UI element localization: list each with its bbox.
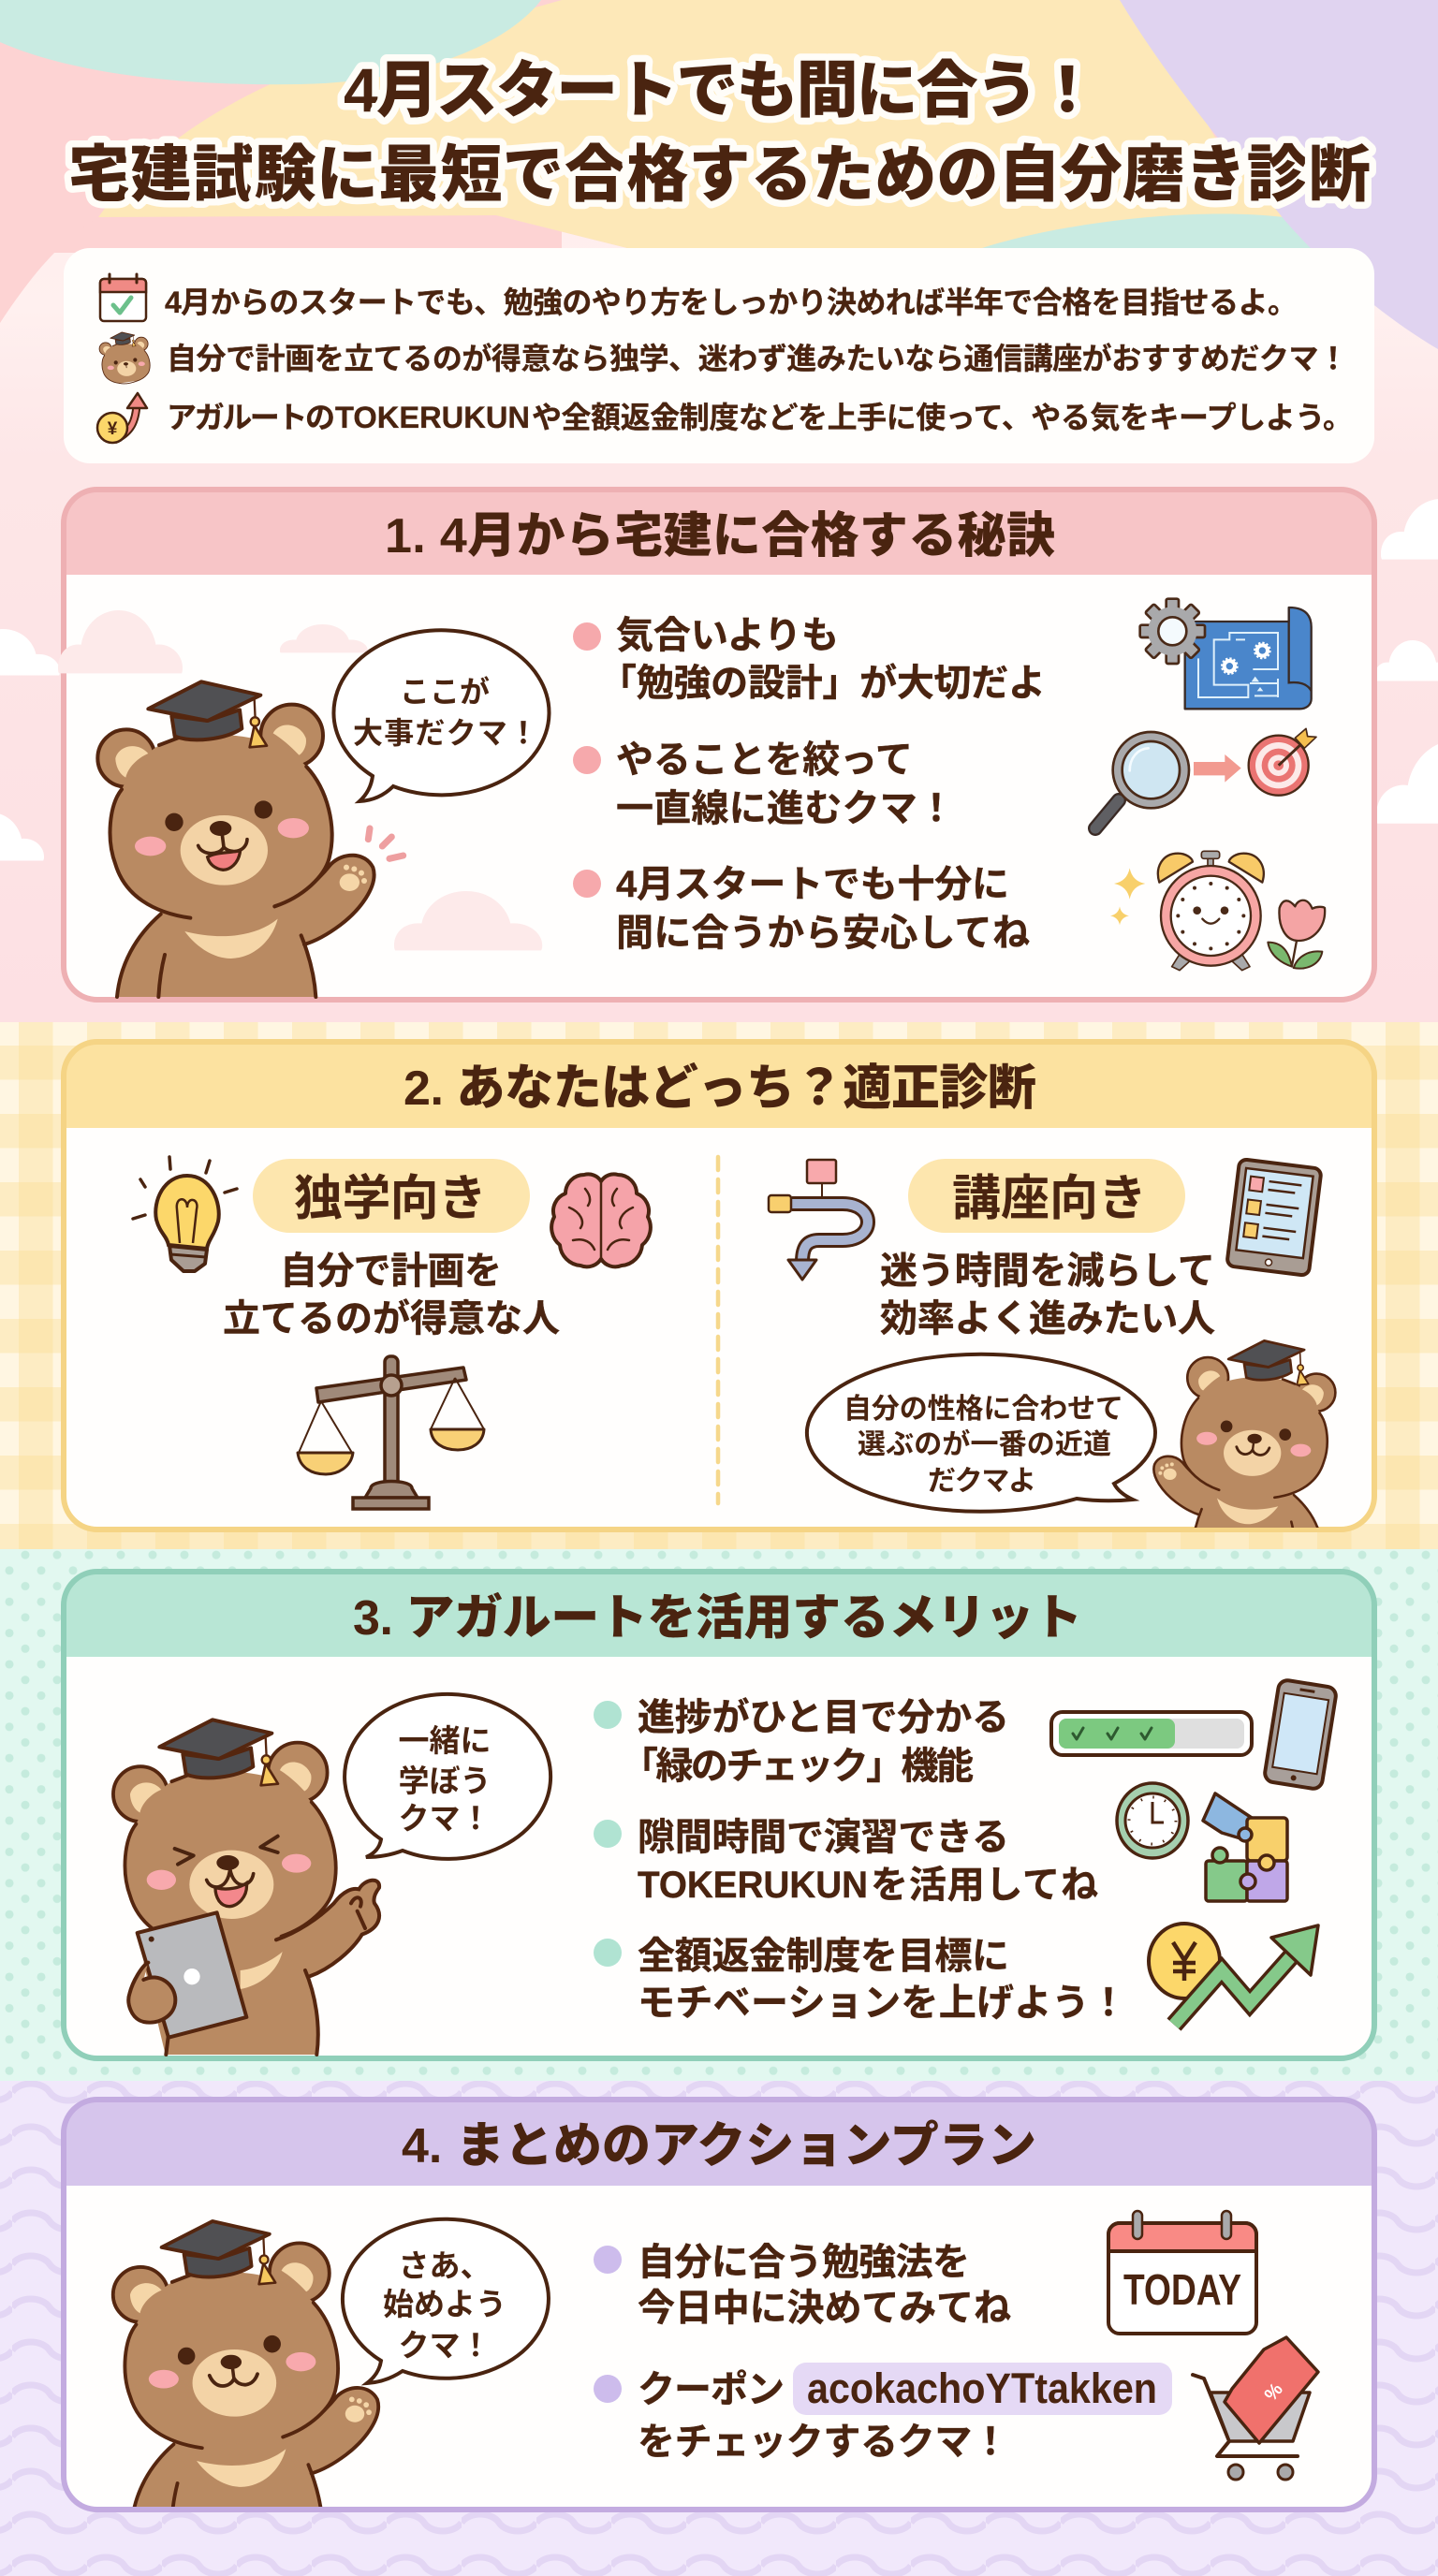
bullet 1-1 [573,615,1046,704]
header 2: 2. あなたはどっち？適正診断 [404,1061,1036,1116]
label: self study [253,1159,530,1233]
bullet 4-1: 今日中に決めてみてね [638,2288,1011,2329]
bullet 3-3: 全額返金制度を目標に [638,1936,1009,1977]
bullet 3-2: 隙間時間で演習できる [638,1817,1009,1858]
icon: yen coin and arrow [97,393,147,443]
bullet 1-1: 気合いよりも [616,615,839,656]
header 2 [64,1042,1374,1128]
label: course: 講座向き [952,1172,1147,1226]
title: 宅建試験に最短で合格するための自分磨き診断 [68,139,1371,209]
speech bubble 3: クマ！ [399,1801,491,1836]
speech bubble 4: クマ！ [399,2328,491,2363]
bullet 3-2 [594,1817,1098,1906]
text: self study description: 自分で計画を [280,1251,502,1292]
icon: yen coin and arrow: ¥ [108,419,118,439]
icon: puzzle [1203,1793,1287,1901]
bullet 1-3: 間に合うから安心してね [616,913,1030,954]
speech bubble 3: 一緒に [399,1723,491,1758]
text: intro line 3 [167,401,1353,434]
icon: blueprint and gear [1140,599,1312,709]
bullet 4-2: をチェックするクマ！ [638,2422,1009,2463]
coupon code: acokachoYTtakken [807,2364,1157,2412]
header 3 [64,1572,1374,1657]
speech bubble 3 [345,1694,550,1859]
title: 4月スタートでも間に合う！ [344,55,1098,124]
bullet 4-2: クーポン [638,2369,785,2410]
icon: progress bar with checks [1051,1712,1252,1755]
bullet 1-1: 「勉強の設計」が大切だよ [599,663,1046,704]
label: course [908,1159,1185,1233]
bullet 1-2: 一直線に進むクマ！ [616,788,955,829]
icon: smartphone [1264,1679,1337,1790]
text: intro line 3: や全額返金制度などを上手に使って、やる気をキープしよう。 [532,401,1353,434]
icon: light bulb [133,1157,237,1271]
icon: mini bear [99,332,150,384]
speech bubble 2: 自分の性格に合わせて [844,1394,1123,1425]
icon: cart with coupon ticket [1193,2337,1318,2480]
icon: brain [551,1174,651,1266]
icon: yen coin and rising arrow [1149,1924,1318,2025]
bullet 3-1: 「緑のチェック」機能 [621,1746,974,1787]
bullet 1-2: やることを絞って [616,739,913,781]
icon: balance scale [298,1356,484,1509]
header 4: 4. まとめのアクションプラン [402,2119,1036,2174]
text: self study description [223,1251,560,1339]
icon: calendar check [100,274,146,321]
bear 3 with tablet [113,1720,379,2055]
text: intro line 2: 自分で計画を立てるのが得意なら独学、迷わず進みたいなら通信講座がおすすめだクマ！ [167,342,1348,375]
bullet 3-1: 進捗がひと目で分かる [638,1697,1009,1738]
speech bubble 1 [333,630,549,801]
panel 3: merits [64,1572,1374,2058]
bullet 4-1: 自分に合う勉強法を [638,2242,970,2283]
header 1: 1. 4月から宅建に合格する秘訣 [385,509,1055,564]
speech bubble 4: さあ、 [399,2248,491,2283]
text: course description: 迷う時間を減らして [880,1251,1215,1292]
bear 1 waving [97,681,404,997]
bear 2 waving [1153,1340,1335,1549]
text: intro line 3: TOKERUKUN [335,401,530,434]
panel 2: diagnosis [64,1042,1374,1549]
speech bubble 2: だクマよ [928,1466,1036,1497]
text: self study description: 立てるのが得意な人 [223,1298,560,1339]
text: intro line 1: 4月からのスタートでも、勉強のやり方をしっかり決めれば半年で合格を目指せるよ。 [165,285,1298,319]
panel 4: action plan [64,2100,1374,2524]
icon: flow route arrow [769,1160,868,1280]
title [68,55,1371,209]
header 4 [64,2100,1374,2186]
speech bubble 1: 大事だクマ！ [353,716,538,750]
header 3: 3. アガルートを活用するメリット [353,1591,1082,1646]
bullet 3-2: TOKERUKUN [638,1865,868,1906]
bullet 1-2 [573,739,955,829]
text: course description: 効率よく進みたい人 [880,1298,1215,1339]
speech bubble 2: 選ぶのが一番の近道 [858,1428,1111,1460]
text: intro line 3: アガルートの [167,401,335,434]
bullet 1-3 [573,864,1030,954]
icon: wall clock [1117,1783,1188,1858]
icon: tablet checklist [1226,1159,1322,1276]
bullet 3-3 [594,1936,1127,2024]
speech bubble 3: 学ぼう [399,1764,491,1798]
icon: magnifier, arrow and target [1095,728,1316,828]
bullet 3-3: モチベーションを上げよう！ [638,1983,1127,2024]
text: course description [880,1251,1215,1339]
icon: cart with coupon ticket: % [1261,2379,1287,2406]
speech bubble 2 [807,1354,1155,1512]
panel: intro summary [64,248,1374,463]
label: self study: 独学向き [294,1172,487,1226]
icon: today calendar [1108,2211,1256,2334]
speech bubble 1: ここが [400,675,490,709]
speech bubble 4: 始めよう [383,2287,506,2321]
panel 1: secrets [58,490,1374,1000]
bullet 3-1 [594,1697,1009,1787]
bullet 3-2: を活用してね [871,1865,1098,1906]
header 1 [64,490,1374,575]
speech bubble 4 [343,2219,549,2383]
bullet 4-2 [594,2363,1172,2463]
bullet 4-1 [594,2242,1011,2329]
bullet 1-3: 4月スタートでも十分に [616,864,1009,905]
icon: today calendar: TODAY [1123,2265,1241,2314]
bear 4 waving [113,2221,378,2524]
icon: alarm clock, sparkles and tulip [1110,851,1325,971]
